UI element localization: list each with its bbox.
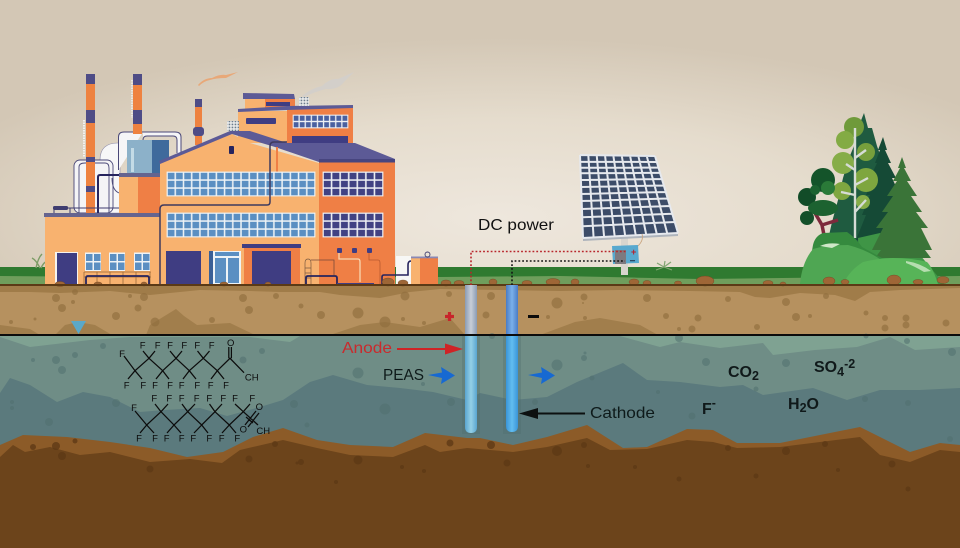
molecule 2: F [249,394,255,404]
molecule 2: O [240,424,247,436]
molecule 2: F [152,434,158,444]
molecule 2: F [179,394,185,404]
hill: mid green behind pine [858,233,945,285]
charge controller box: + [631,247,636,257]
molecule 1: F [155,340,161,352]
ground rocks [55,275,949,286]
water table triangle marker [71,321,86,334]
side tank and pipes [382,252,438,286]
molecule 1: F [209,340,215,352]
molecule 2: CH [256,426,270,437]
molecule 2: F [131,403,137,414]
chimney 2 [132,74,142,134]
anode arrow [397,344,463,354]
ground surface line [0,284,960,286]
chemical label: F-: F [702,401,712,418]
molecule 1: F [167,340,173,352]
cathode well [503,285,521,434]
main hall [159,131,395,286]
molecule 1: F [152,380,158,392]
panel frame [580,155,678,241]
molecule 2: F [151,394,157,404]
aquifer upper layer [0,335,960,450]
red dotted wire to anode [471,252,627,285]
molecule 2: F [166,394,172,404]
chemical label: SO4-2: -2 [844,357,855,371]
factory [44,72,438,286]
molecule 1: CH [245,372,259,384]
molecule 1: F [119,349,125,360]
molecule 2: F [234,434,240,444]
chemical label: SO4-2: 4 [837,365,844,379]
sky background [0,0,960,290]
tree: white-trunk tree [832,117,878,238]
molecule 1: F [181,340,187,352]
molecule 2: F [194,394,200,404]
deep soil pebbles [30,438,910,492]
tree: dark pine back [828,113,905,250]
molecule 1: F [208,380,214,392]
molecule 1: F [140,380,146,392]
door left [166,251,201,285]
lower left wing [44,213,160,286]
molecule 2: F [190,434,196,444]
side block [53,173,160,213]
PEAS arrow left [428,367,455,384]
dark windows row 2 [323,213,383,237]
molecule 1: F [223,380,229,392]
DC power label: DC power [478,217,555,234]
water table line [0,334,960,336]
main deep soil [0,437,960,548]
soil highlight band [0,425,960,548]
molecule 1: F [179,380,185,392]
panel post [621,238,628,275]
lower soil [0,425,960,548]
PEAS arrow right [528,367,555,384]
trees and hills [798,113,945,285]
grass strip [0,254,960,287]
right orange block [319,162,395,286]
roof [159,131,395,164]
molecule 2: F [179,434,185,444]
molecule 2: F [232,394,238,404]
top dark soil band [0,285,960,301]
soil pebbles [9,289,950,332]
smoke [198,72,354,97]
upper buildings [227,93,353,144]
dark windows row 1 [323,172,383,196]
windows row 1 [167,172,315,196]
light water band [0,335,960,355]
molecule 2: F [136,434,142,444]
molecule 1: F [167,380,173,392]
chemical label: H2O: H [788,396,800,413]
blue tank [127,140,169,177]
black dotted wire to cathode [512,261,625,285]
windows row 2 [167,213,315,237]
chemical label: SO4-2: SO [814,359,837,376]
molecule 2 [131,394,270,444]
lower dark soil mounds [0,309,658,335]
molecule 2: F [164,434,170,444]
aquifer lower layer [0,363,960,460]
molecule 2: F [206,394,212,404]
PEAS label: PEAS [383,367,424,384]
positive sign [445,312,454,321]
negative sign [528,315,539,318]
upper soil layer [0,285,960,335]
wall pipe [160,142,287,285]
tree: dark pine middle [856,137,912,240]
aquifer [0,333,960,460]
molecule 1: F [140,340,146,352]
cathode label: Cathode [590,405,655,422]
aquifer pebbles [10,333,956,442]
garage door with orange surround [242,244,301,286]
molecule 2: O [256,402,263,413]
solar panel [580,155,678,275]
cathode arrow [519,408,585,419]
molecule 1: F [194,340,200,352]
molecule 2: F [219,434,225,444]
molecule 1 [119,338,259,392]
chimney 3 [193,99,204,145]
hill: green mounds [800,232,938,285]
back white pipes and tanks [74,132,181,213]
chemical label: H2O: 2 [800,401,807,415]
chemical label: H2O: O [807,396,819,413]
right-side pipework [305,248,380,286]
tree: green pine [872,157,932,258]
glass door [209,251,241,285]
molecule 2: F [206,434,212,444]
molecule 1: O [227,338,234,349]
anode label: Anode [342,340,392,357]
anode well [462,285,480,434]
tree: dark leafy tree [798,168,838,240]
chemical label: CO2: 2 [752,369,759,383]
molecule 1: F [124,380,130,392]
chimney 1 [84,74,95,213]
chemical label: F-: - [712,396,716,410]
chemical label: CO2: CO [728,364,752,381]
molecule 1: F [194,380,200,392]
molecule 2: F [220,394,226,404]
